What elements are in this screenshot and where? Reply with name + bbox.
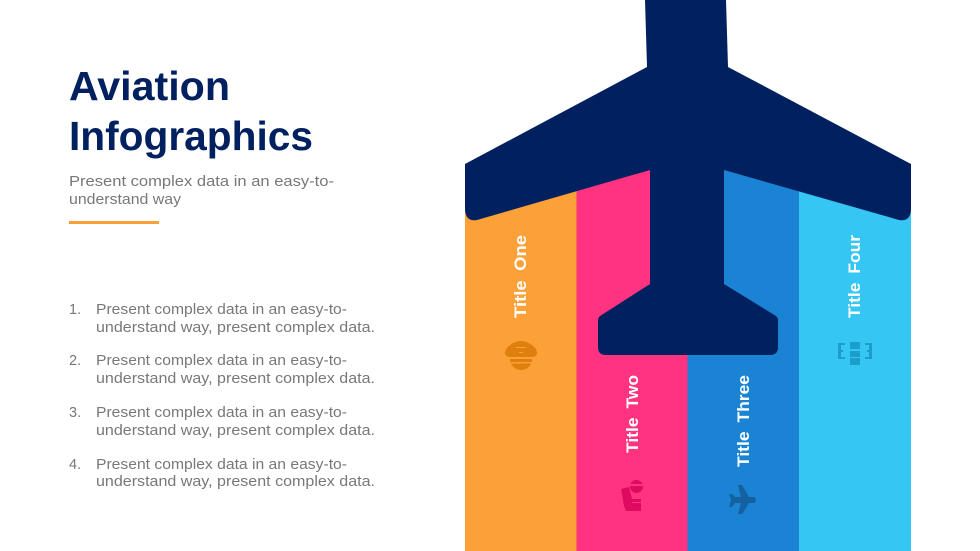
- subtitle: understand way: [69, 191, 182, 208]
- icon: pilot cap: [505, 341, 537, 370]
- list item 3: understand way, present complex data.: [96, 423, 375, 439]
- airplane silhouette: [465, 0, 911, 355]
- subtitle: Present complex data in an easy-to-: [69, 173, 334, 190]
- icon: airplane seat with passenger: [621, 480, 644, 511]
- list item 3: Present complex data in an easy-to-: [96, 405, 347, 421]
- panel: title two stripe: [576, 160, 688, 551]
- title: Infographics: [69, 113, 313, 159]
- label: title one: Title One: [511, 235, 530, 318]
- label: title two: Title Two: [623, 375, 642, 453]
- list item 3: [69, 405, 375, 439]
- panel: title three stripe: [688, 160, 799, 551]
- list item 1: Present complex data in an easy-to-: [96, 302, 347, 318]
- list item 2: [69, 353, 375, 387]
- list item 1: [69, 302, 375, 336]
- list item 4: [69, 457, 375, 490]
- title: [69, 63, 313, 159]
- subtitle: [69, 173, 334, 208]
- list item 2: 2.: [69, 353, 81, 369]
- list item 4: Present complex data in an easy-to-: [96, 457, 347, 473]
- numbered list: [69, 302, 375, 490]
- panel: title one stripe: [465, 180, 576, 551]
- list item 4: 4.: [69, 457, 81, 473]
- list item 1: understand way, present complex data.: [96, 320, 375, 336]
- icon: small airplane: [729, 485, 756, 514]
- list item 4: understand way, present complex data.: [96, 474, 375, 490]
- list item 1: 1.: [69, 302, 81, 318]
- list item 3: 3.: [69, 405, 81, 421]
- title: Aviation: [69, 63, 230, 109]
- label: title four: Title Four: [845, 235, 864, 318]
- panel: title four stripe: [799, 180, 911, 551]
- icon: security scanner: [838, 342, 872, 365]
- accent underline: [69, 221, 159, 224]
- label: title three: Title Three: [734, 375, 753, 467]
- list item 2: understand way, present complex data.: [96, 371, 375, 387]
- list item 2: Present complex data in an easy-to-: [96, 353, 347, 369]
